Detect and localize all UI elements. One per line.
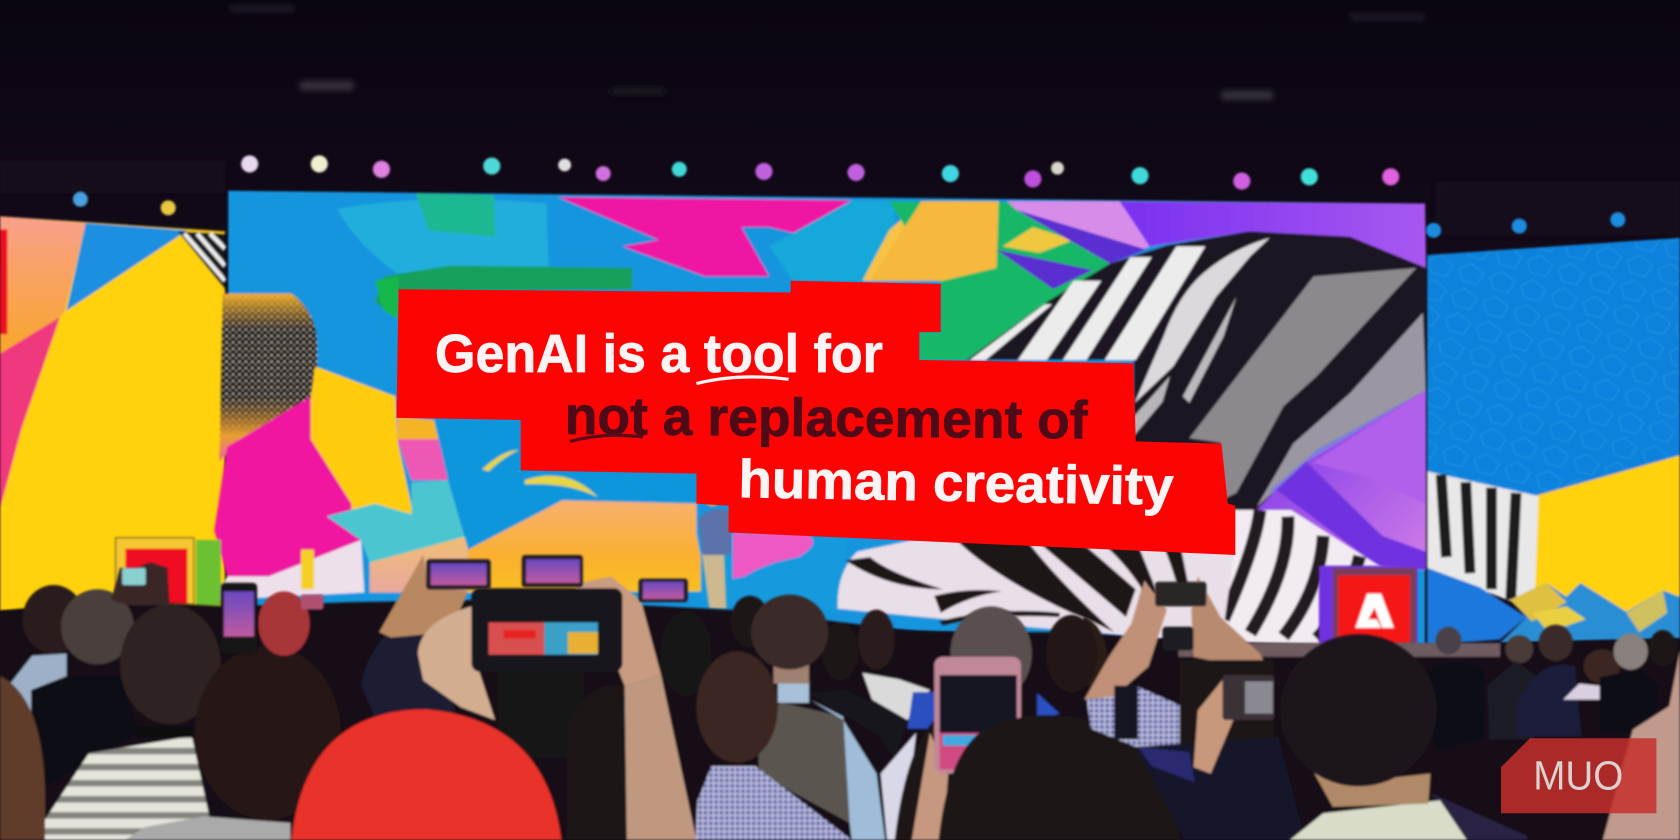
person: raised arms right [1084,580,1167,700]
person: black jacket [31,676,138,786]
underline: not [570,435,643,441]
hand foreground right edge [1603,650,1680,840]
stage lights row [73,155,1625,238]
artwork: lower left zebra stripes [838,532,1234,643]
person: far-left dark hair [22,585,85,654]
artwork: sand floor [467,500,707,592]
headline line 2: not a replacement of [565,387,1088,450]
Adobe logo sign [1319,566,1418,645]
watermark text: MUO [1533,753,1623,799]
MUO watermark [1501,738,1656,813]
artwork: dotted form fade [220,294,317,461]
underline: tool [696,377,789,384]
person: blue shirt [9,654,66,718]
artwork: yellow form [311,366,414,536]
artwork: blue wedge with birds [434,420,696,550]
person: left edge hair [0,676,45,840]
panel: right LED screen [1427,238,1680,645]
person: right group [1427,625,1677,840]
sleeve: checked [1086,686,1184,753]
icon: large phone [471,588,622,672]
person: raised arm [625,675,696,840]
artwork: dotted form [220,294,317,461]
icon: tall phone [934,657,1021,774]
phones in hands, upper row [111,555,688,654]
person: red hair at the back [258,591,310,656]
person: red hair [291,709,561,840]
artwork: paint splashes top [338,193,1426,360]
person: vest [759,703,850,823]
person: dark hair, middle [567,685,625,840]
panel: centre LED screen [116,191,1426,648]
crowd: dark silhouette base [0,555,1680,840]
left hand upper [379,555,468,638]
artwork: teal and peach wash [370,534,468,592]
back row heads, centre [660,596,1108,701]
headline line 3: human creativity [738,450,1174,517]
person: checked shirt [696,651,778,763]
person: front centre dark head [939,715,1180,840]
panel: red headline banner [396,281,1235,555]
artwork: magenta form [214,396,361,576]
person: hooded back [361,606,455,718]
artwork: lower right zebra stripes [1189,510,1382,645]
hand holding phone left [418,606,495,720]
suits, centre [809,690,908,760]
person: dark hair with hand, front centre [895,720,954,840]
headline line 1: GenAI is a tool for [435,325,883,384]
ceiling rig [0,6,1680,236]
person: striped shirt [45,736,210,840]
artwork: purple drape [1257,390,1426,570]
booth: left red and green box [116,538,194,604]
artwork: speckled white form [214,540,364,600]
person: centre-left dark hair [125,816,290,840]
artwork: zebra form [966,231,1426,557]
panel: left LED screen [0,216,225,611]
hand holding phone right [575,576,661,686]
icon: Adobe A [1355,594,1394,628]
presenter on stage [699,485,731,609]
icon: phones held right [1155,582,1274,720]
person: large dark head, foreground right [1280,634,1467,840]
